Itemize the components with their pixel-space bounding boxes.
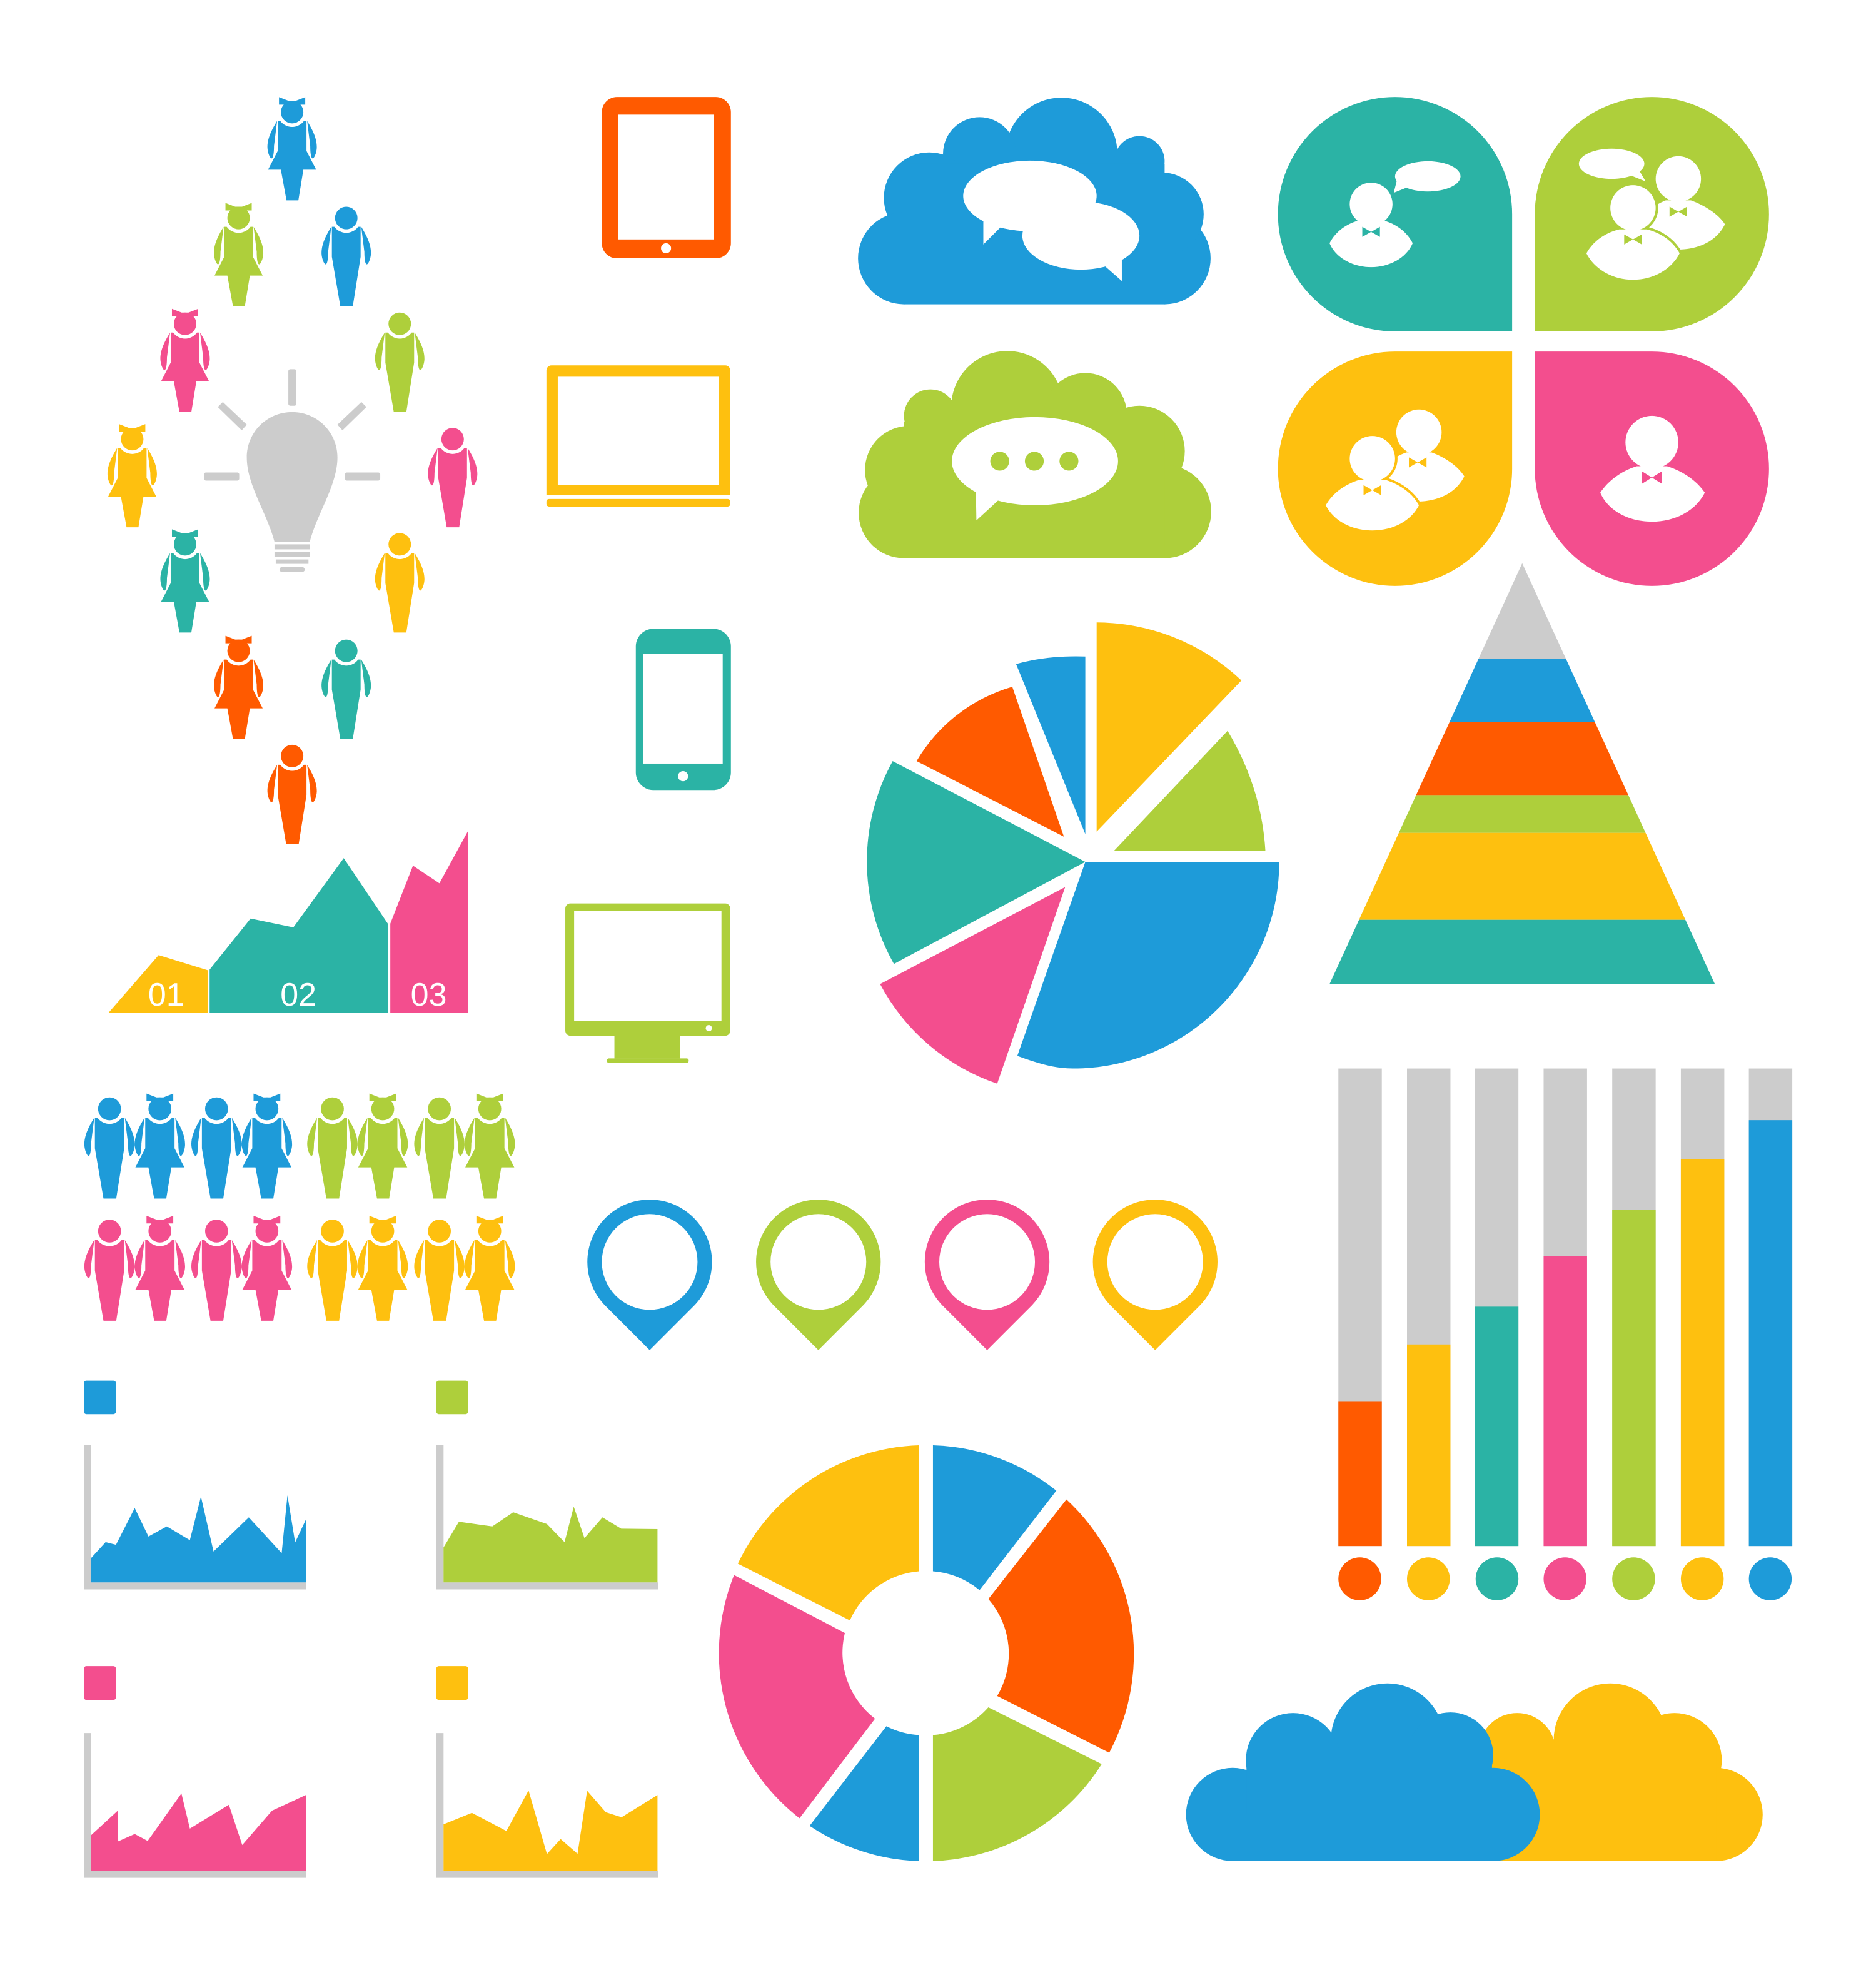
- petal: pink single user: [1535, 351, 1769, 586]
- area: 01: 01: [148, 977, 184, 1013]
- bar chart: [1338, 1069, 1792, 1600]
- icon: light bulb: [204, 369, 380, 572]
- area chart: blue: [84, 1381, 306, 1589]
- figure: male yellow: [375, 533, 425, 632]
- row: blue people: [84, 1094, 292, 1198]
- clouds: blue and yellow: [1186, 1684, 1763, 1861]
- figure: male teal: [321, 640, 371, 739]
- cloud: yellow back: [1473, 1684, 1763, 1861]
- area: 03: [390, 831, 468, 1013]
- area: 02: [209, 858, 388, 1013]
- petal: teal user with speech bubble: [1278, 97, 1512, 331]
- figure: female yellow: [108, 424, 157, 527]
- figure: male blue: [321, 207, 371, 306]
- figure: female pink: [160, 309, 209, 412]
- area chart: yellow: [436, 1666, 658, 1878]
- icon: phone: [636, 629, 731, 790]
- area: 01: [108, 955, 208, 1013]
- cloud: green with speech bubble: [859, 351, 1211, 558]
- pin: green: [756, 1200, 880, 1350]
- donut chart: [719, 1445, 1134, 1861]
- pin: yellow: [1093, 1200, 1218, 1350]
- area chart 01 02 03: [108, 831, 468, 1013]
- pin: pink: [925, 1200, 1049, 1350]
- map pins: [587, 1200, 1218, 1350]
- people diamond: [108, 97, 477, 844]
- people rows: [84, 1094, 515, 1321]
- pin: blue: [587, 1200, 712, 1350]
- figure: female blue: [268, 97, 317, 200]
- cloud: blue with two speech bubbles: [858, 98, 1211, 305]
- figure: male pink: [428, 428, 477, 527]
- petal: yellow two users: [1278, 351, 1512, 586]
- figure: female orange: [214, 636, 263, 739]
- figure: male green: [375, 313, 425, 412]
- pie chart: [867, 622, 1279, 1084]
- area: 02: 02: [280, 977, 316, 1013]
- row: pink people: [84, 1216, 292, 1321]
- row: yellow people: [307, 1216, 515, 1321]
- icon: laptop: [547, 365, 730, 507]
- area chart: pink: [84, 1666, 306, 1878]
- pyramid: [1329, 563, 1715, 984]
- area chart: green: [436, 1381, 658, 1589]
- petal: green two users with speech bubble: [1535, 97, 1769, 331]
- area: 03: 03: [411, 977, 446, 1013]
- figure: female green: [214, 203, 263, 306]
- icon: monitor: [565, 904, 730, 1063]
- figure: male orange: [268, 745, 317, 844]
- cloud: blue front: [1186, 1684, 1540, 1861]
- row: green people: [307, 1094, 515, 1198]
- icon: tablet: [602, 97, 731, 258]
- figure: female teal: [160, 529, 209, 632]
